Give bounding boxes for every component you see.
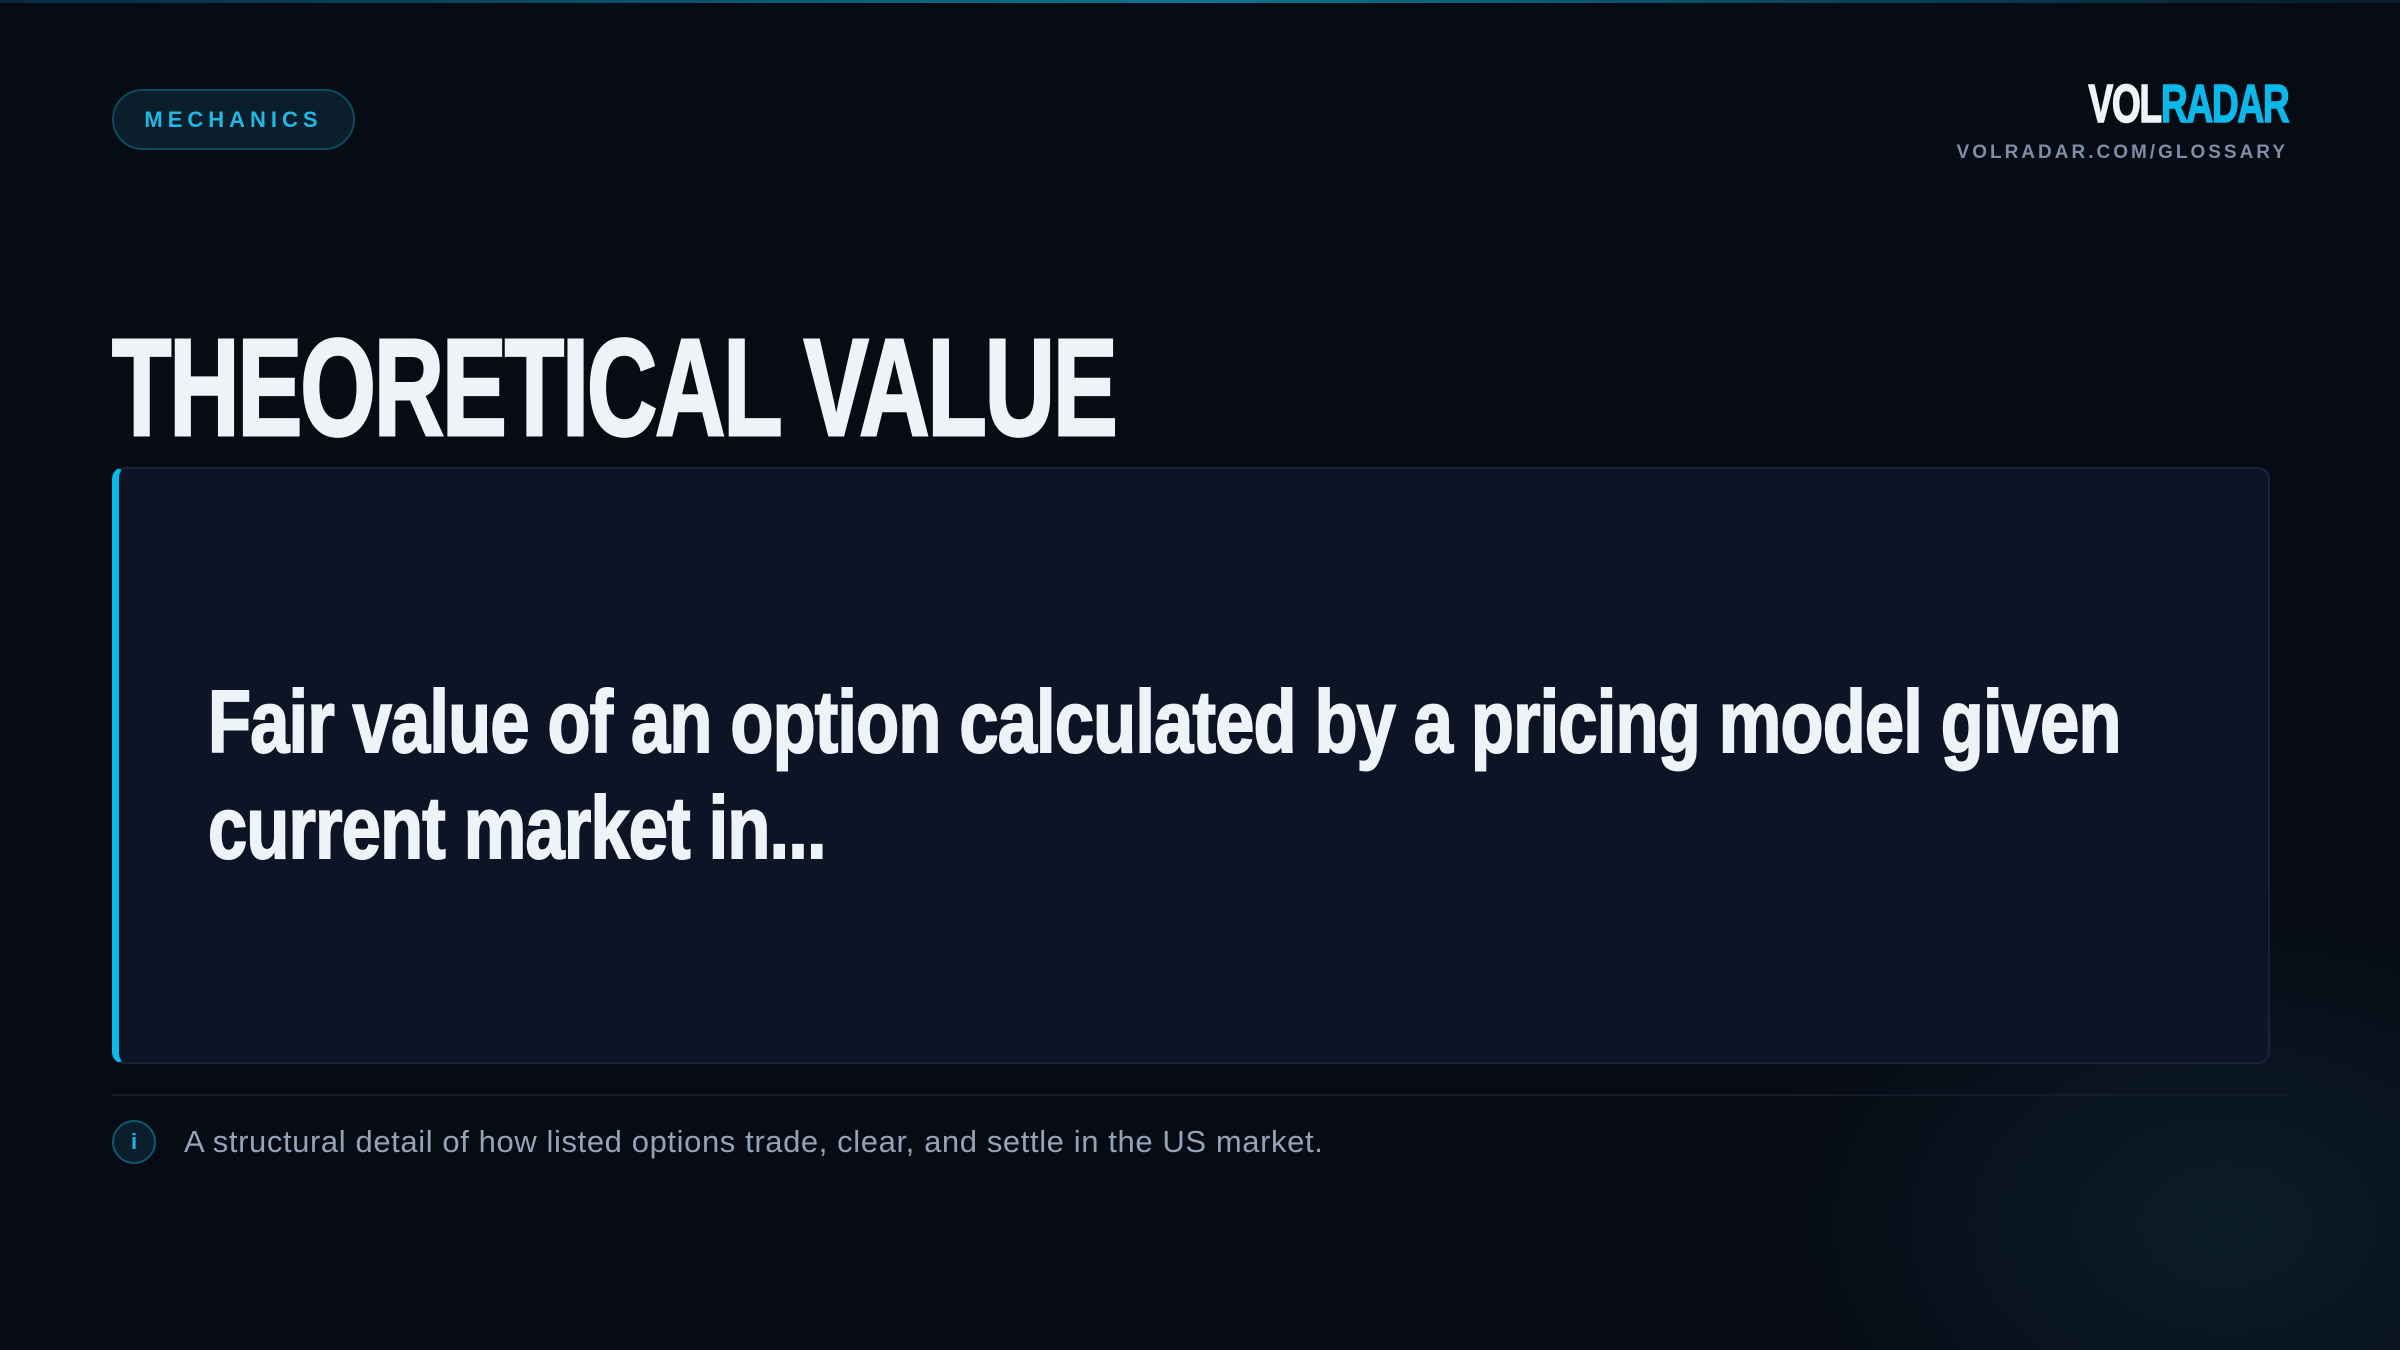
definition text — [208, 672, 2121, 877]
footer note — [112, 1120, 1323, 1164]
icon: info: i — [131, 1129, 137, 1154]
definition card — [112, 467, 2270, 1064]
footer text: A structural detail of how listed options trade, clear, and settle in the US market. — [184, 1124, 1323, 1159]
logo — [1956, 74, 2290, 163]
badge: mechanics: MECHANICS — [144, 106, 323, 132]
title: THEORETICAL VALUE — [112, 311, 1116, 465]
icon: info — [112, 1120, 156, 1164]
definition text: Fair value of an option calculated by a pricing model given — [208, 672, 2121, 771]
definition text: current market in... — [208, 778, 826, 877]
badge: mechanics — [112, 89, 355, 150]
logo url: VOLRADAR.COM/GLOSSARY — [1957, 142, 2288, 163]
logo wordmark: VOLRADAR — [2088, 74, 2288, 134]
